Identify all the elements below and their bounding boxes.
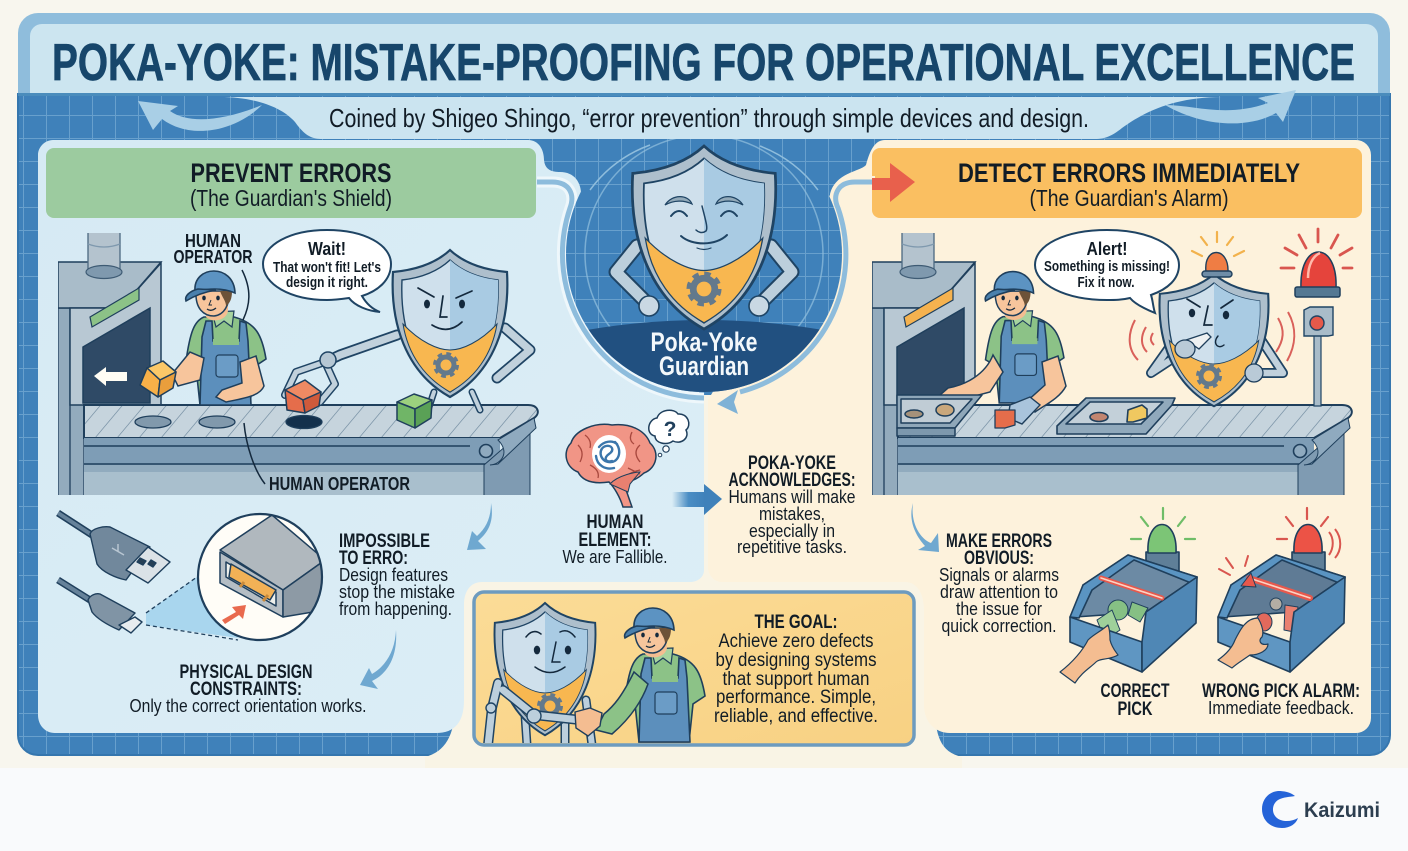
labels: correct pick bbox=[1100, 681, 1170, 720]
label: human operator pointer bbox=[242, 270, 249, 320]
robot arm bbox=[488, 683, 580, 745]
text: human element: We are Fallible. bbox=[562, 547, 668, 567]
guardian gear bbox=[1199, 366, 1219, 386]
operator arms bbox=[172, 352, 204, 386]
bin bbox=[1223, 555, 1345, 617]
machine and conveyor bbox=[58, 233, 538, 498]
header: detect errors: DETECT ERRORS IMMEDIATELY bbox=[958, 158, 1300, 188]
label: human operator top: OPERATOR bbox=[174, 247, 252, 267]
text: impossible to erro bbox=[339, 531, 455, 619]
illustration: handshake bbox=[486, 603, 705, 745]
arrow: header right bbox=[872, 163, 915, 202]
text: poka-yoke acknowledges: especially in bbox=[749, 521, 835, 541]
goal text: reliable, and effective. bbox=[714, 706, 878, 727]
magnifier cone bbox=[146, 577, 238, 640]
machine display bbox=[904, 288, 953, 327]
text: impossible to erro: IMPOSSIBLE bbox=[339, 531, 430, 552]
arrow: to physical design bbox=[360, 630, 396, 689]
labels: correct pick: PICK bbox=[1118, 699, 1153, 720]
panel: prevent errors bbox=[38, 140, 704, 733]
panel: detect errors bbox=[708, 140, 1371, 733]
speech bubble: wait bbox=[263, 230, 391, 312]
text: poka-yoke acknowledges: POKA-YOKE bbox=[748, 453, 836, 474]
green lamp bbox=[1146, 524, 1179, 572]
speech bubble: wait: Wait! bbox=[308, 239, 346, 259]
guardian gear bbox=[690, 276, 718, 302]
scene: prevent errors conveyor bbox=[58, 233, 538, 498]
hand bbox=[1060, 625, 1118, 683]
text: make errors obvious: the issue for bbox=[956, 599, 1042, 619]
usb plugs bbox=[58, 513, 170, 633]
face bbox=[526, 631, 575, 672]
labels: wrong pick alarm bbox=[1202, 681, 1360, 718]
arrow: subtitle left bbox=[138, 101, 262, 131]
red cube bbox=[285, 380, 321, 413]
label: human operator bottom: HUMAN OPERATOR bbox=[269, 474, 410, 494]
goal text: performance. Simple, bbox=[716, 687, 876, 708]
goal text: by designing systems bbox=[716, 650, 876, 671]
tray right bbox=[1057, 398, 1175, 434]
lamp rays bbox=[1277, 508, 1328, 539]
icon: thought bubble bbox=[649, 410, 689, 457]
shield bbox=[495, 603, 595, 735]
beacon rays bbox=[1192, 232, 1244, 256]
text: physical design: PHYSICAL DESIGN bbox=[180, 662, 312, 683]
worker bbox=[625, 608, 705, 742]
red lamp bbox=[1292, 524, 1325, 572]
arrow: human element to acknowledges bbox=[672, 484, 722, 515]
text: poka-yoke acknowledges: Humans will make bbox=[728, 487, 856, 507]
spark marks bbox=[1219, 556, 1248, 575]
guardian shield bbox=[1160, 274, 1268, 406]
arrow head: right arc bbox=[717, 390, 738, 414]
speech bubble: wait: design it right. bbox=[286, 274, 368, 291]
goal text: THE GOAL: bbox=[754, 612, 838, 633]
guardian arms bbox=[1151, 335, 1283, 373]
goal text bbox=[714, 612, 878, 727]
text: impossible to erro: Design features bbox=[339, 565, 448, 585]
worker arm bbox=[596, 672, 648, 734]
operator arms bbox=[940, 355, 1003, 402]
gear bbox=[540, 696, 560, 716]
title band bbox=[18, 24, 1390, 96]
connector: left arc bbox=[537, 182, 704, 398]
text: impossible to erro: from happening. bbox=[339, 599, 452, 619]
icon: correct pick bin bbox=[1060, 508, 1197, 683]
text: human element bbox=[562, 512, 668, 567]
header: prevent errors: PREVENT ERRORS bbox=[190, 158, 392, 188]
text: poka-yoke acknowledges: mistakes, bbox=[759, 504, 825, 524]
guardian beacon bbox=[1202, 252, 1232, 277]
gloved hand bbox=[1008, 397, 1040, 424]
text: make errors obvious bbox=[939, 531, 1059, 636]
alarm stand bbox=[1314, 330, 1321, 406]
guardian shield bbox=[632, 146, 776, 329]
text: make errors obvious: OBVIOUS: bbox=[964, 548, 1034, 569]
labels: correct pick: CORRECT bbox=[1100, 681, 1170, 702]
icon: wrong pick bin bbox=[1218, 508, 1345, 672]
alarm button bbox=[1304, 307, 1333, 336]
handshake bbox=[575, 708, 602, 736]
subtitle: Coined by Shigeo Shingo, “error prevention” through simple devices and design. bbox=[329, 103, 1089, 133]
header: prevent errors: (The Guardian's Shield) bbox=[190, 185, 392, 211]
arrow: to impossible bbox=[467, 503, 492, 550]
labels: wrong pick alarm: WRONG PICK ALARM: bbox=[1202, 681, 1360, 702]
header: prevent errors bbox=[46, 148, 536, 218]
micro usb plug bbox=[58, 580, 142, 633]
text: make errors obvious: MAKE ERRORS bbox=[946, 531, 1052, 552]
speech bubble: wait: That won't fit! Let's bbox=[273, 259, 381, 276]
text: human element: ELEMENT: bbox=[578, 530, 652, 551]
conveyor pointer bbox=[244, 423, 265, 484]
callout: the goal bbox=[474, 592, 914, 745]
icon: thought bubble: ? bbox=[664, 418, 676, 441]
text: poka-yoke acknowledges: repetitive tasks. bbox=[737, 537, 847, 557]
text: physical design: Only the correct orientation works. bbox=[130, 696, 366, 716]
scene: detect errors conveyor bbox=[872, 229, 1352, 498]
text: make errors obvious: quick correction. bbox=[942, 616, 1056, 636]
machine arrow bbox=[94, 367, 127, 386]
guardian shield bbox=[393, 250, 507, 397]
machine and conveyor bbox=[872, 233, 1352, 498]
speech bubble: alert: Something is missing! bbox=[1044, 258, 1170, 275]
guardian left arm and claw bbox=[285, 335, 397, 402]
alarm beacon bbox=[1295, 252, 1340, 297]
lamp rays bbox=[1131, 508, 1195, 539]
icon: brain bbox=[566, 424, 656, 507]
bin bbox=[1075, 555, 1197, 617]
text: impossible to erro: TO ERRO: bbox=[339, 548, 408, 569]
logo: kaizumi bbox=[1262, 791, 1380, 828]
header: detect errors bbox=[872, 148, 1362, 218]
alarm rays bbox=[1281, 229, 1352, 268]
magnifier bbox=[198, 514, 325, 640]
labels: wrong pick alarm: Immediate feedback. bbox=[1208, 698, 1354, 718]
usb-a plug bbox=[58, 513, 170, 583]
guardian gear bbox=[436, 355, 456, 375]
arrow: to make errors obvious bbox=[911, 503, 939, 552]
text: physical design: CONSTRAINTS: bbox=[190, 679, 302, 700]
central guardian emblem: Guardian bbox=[659, 351, 749, 381]
text: make errors obvious: Signals or alarms bbox=[939, 565, 1059, 585]
text: poka-yoke acknowledges bbox=[728, 453, 856, 557]
guardian angry face bbox=[1187, 299, 1233, 347]
conveyor holes bbox=[135, 416, 322, 428]
sound waves right bbox=[1276, 312, 1294, 361]
green cube bbox=[397, 394, 432, 428]
tray left bbox=[897, 395, 982, 436]
text: make errors obvious: draw attention to bbox=[940, 582, 1058, 602]
speech bubble: alert: Fix it now. bbox=[1078, 274, 1134, 291]
guardian name: Poka-Yoke bbox=[650, 327, 758, 357]
label: human operator top bbox=[174, 231, 252, 267]
red part bbox=[995, 410, 1015, 428]
goal text: that support human bbox=[722, 669, 870, 690]
connector: right arc bbox=[740, 182, 875, 392]
subtitle band bbox=[220, 97, 1222, 139]
operator bbox=[186, 271, 266, 405]
text: impossible to erro: stop the mistake bbox=[339, 582, 455, 602]
label: human operator top: HUMAN bbox=[185, 231, 241, 251]
arrow: subtitle right bbox=[1165, 90, 1296, 123]
logo: kaizumi: Kaizumi bbox=[1304, 799, 1380, 822]
alarm sound bbox=[1329, 529, 1340, 558]
header: detect errors: (The Guardian's Alarm) bbox=[1030, 185, 1228, 211]
guardian face bbox=[418, 288, 472, 329]
goal text: Achieve zero defects bbox=[718, 631, 874, 652]
orange cube bbox=[140, 361, 176, 397]
text: human element: HUMAN bbox=[586, 512, 644, 533]
guardian face bbox=[665, 197, 743, 250]
text: poka-yoke acknowledges: ACKNOWLEDGES: bbox=[728, 470, 856, 491]
guardian right arm bbox=[428, 328, 530, 410]
speech bubble: alert bbox=[1035, 230, 1179, 313]
machine display bbox=[90, 288, 139, 327]
robot legs bbox=[525, 700, 592, 745]
sound waves left bbox=[1130, 320, 1154, 360]
hand bbox=[1218, 618, 1268, 668]
operator bbox=[985, 272, 1064, 403]
text: physical design bbox=[130, 662, 366, 716]
cream notch behind goal box and centre gutter bbox=[425, 395, 962, 768]
central guardian emblem bbox=[537, 116, 875, 414]
guardian arms bbox=[616, 246, 792, 302]
whistle and hand bbox=[1175, 333, 1263, 382]
speech bubble: alert: Alert! bbox=[1086, 239, 1128, 259]
